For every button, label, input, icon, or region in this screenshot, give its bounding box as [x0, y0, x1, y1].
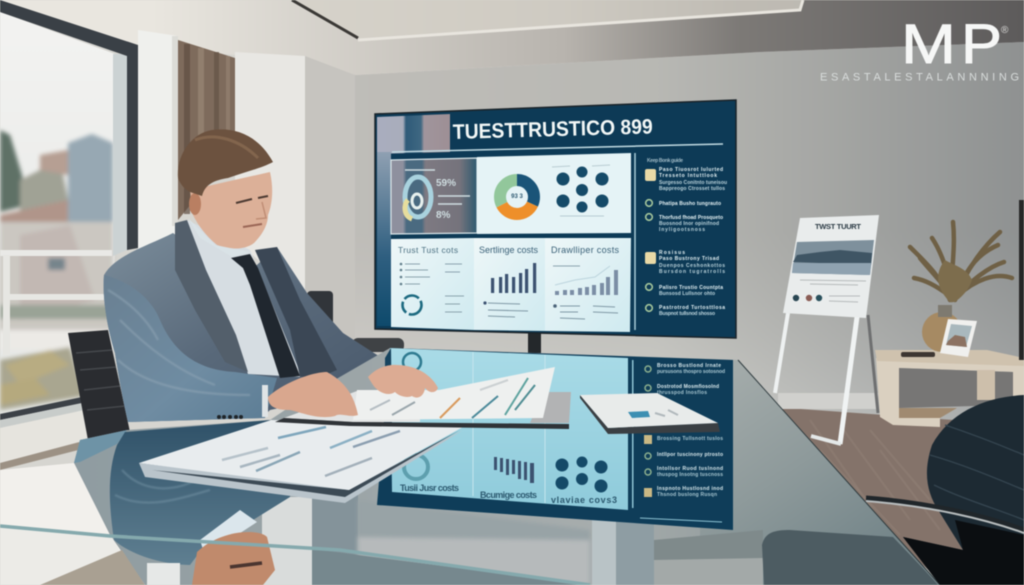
panel: key points list: Buspnot tullsnod shosso	[659, 311, 715, 317]
panel: key points list: Thorfusd fhoad Prosqueto	[659, 215, 723, 221]
reflected screen	[377, 348, 733, 530]
right black office chair	[866, 395, 1024, 585]
window with outdoor view	[0, 0, 138, 470]
reflected screen: Intllpor tuscinony ptrosto	[657, 452, 723, 458]
sleeve	[104, 275, 277, 422]
panel: key points list: Bappreogo Ctrosset tullos	[659, 186, 725, 192]
bright floor and window reflection	[0, 430, 145, 585]
poster title: TWST TUURT	[815, 222, 861, 231]
icon cluster	[556, 166, 608, 212]
panel: settling costs bar chart	[474, 238, 545, 331]
lapel	[175, 220, 248, 372]
reflected screen: vlaviae covs3	[551, 495, 617, 505]
panel: key points list: Rosisus	[659, 250, 685, 256]
logo: M	[901, 12, 956, 75]
reflected screen: Inspnoto Hustlosnd inod	[657, 486, 723, 492]
ceiling with soffit	[0, 0, 1024, 77]
panel: key points list: Surgesso Conitnto tuneisou	[659, 180, 727, 186]
panel: key points list: Duenpos Ceshonkottos	[659, 263, 725, 269]
curtain	[178, 40, 235, 220]
panel: drawing costs area bars: Drawlliper costs	[551, 245, 620, 255]
jacket buttons	[217, 415, 243, 419]
reflected screen: Bcumige costs	[480, 490, 537, 500]
table right edge line	[738, 360, 940, 585]
panel: key points list: Phatipa Busho tungrauto	[659, 201, 721, 207]
reflected screen: Brosso Bustlond Irnate	[657, 363, 721, 369]
reflected chair	[762, 530, 938, 585]
presentation easel poster	[775, 215, 879, 444]
glass table front edge	[0, 526, 590, 585]
shirt	[187, 220, 302, 377]
logo: P	[961, 12, 1002, 75]
reflected screen: Intollsor Ruod tuslnond	[657, 466, 723, 472]
rear chairs	[307, 291, 404, 352]
right side floor	[740, 393, 1024, 585]
left wall panels	[138, 30, 355, 340]
back wall	[355, 42, 1024, 420]
panel: donut and icon cluster	[477, 153, 631, 234]
glass surface at right	[733, 360, 940, 585]
near hand	[268, 372, 358, 417]
panel: key points list: Paso Bustrony Trisad	[659, 256, 719, 262]
plant in gold vase	[910, 222, 1012, 352]
poster photograph	[792, 240, 874, 275]
panel: key points list: Tresseto Intuttlook	[659, 173, 717, 179]
panel: percentage gauge	[391, 158, 477, 234]
small photo frame	[940, 319, 977, 357]
right document	[580, 393, 720, 434]
panel: key points list: Bunsosd Lullsnor ohto	[659, 291, 715, 297]
panel: key points list: Paso Tiuosrot Iulurted	[659, 167, 723, 173]
panel: percentage gauge: 59%	[436, 178, 456, 189]
reflection of man in table	[110, 420, 300, 585]
logo: ESASTALESTALANNNING	[820, 72, 1019, 84]
side table	[875, 350, 1024, 427]
reflected screen: thuspog Insotng tuscnoss	[657, 472, 723, 478]
panel: key points list	[645, 158, 727, 317]
tie	[231, 254, 300, 378]
left black office chair	[68, 330, 130, 440]
reflected screen: pursusons thospro sotosnod	[657, 369, 725, 375]
panel: settling costs bar chart: Sertlinge costs	[479, 245, 538, 255]
logo: ®	[1001, 25, 1009, 36]
panel: key points list: Buosnod Inor opinifnod	[659, 221, 719, 227]
panel: drawing costs area bars	[545, 238, 631, 332]
donut chart	[500, 180, 534, 214]
stand	[528, 333, 541, 353]
wall-mounted screen dashboard	[375, 100, 736, 353]
reflected screen: Brossing Tullsnott tuslos	[657, 436, 723, 442]
panel: key points list: Bursdon tugratrolls	[659, 269, 725, 275]
front paper stack	[139, 420, 463, 503]
right jacket shadow	[255, 247, 337, 377]
reflected wall and column	[262, 490, 654, 585]
bottom reflected band	[654, 542, 763, 585]
screen title: TUESTTRUSTICO 899	[452, 115, 653, 144]
far hand	[368, 365, 438, 398]
reflected screen: thrusspod Inosflos	[657, 390, 707, 396]
panel: key points list: Inyligootsnoss	[659, 227, 705, 233]
donut chart: 93 3	[511, 194, 523, 200]
glass table	[74, 348, 940, 585]
document under hands	[275, 367, 571, 429]
jacket	[104, 233, 388, 422]
reflected screen: Thsnod buslong Rusqn	[657, 492, 717, 498]
panel: key points list: Palisro Trustio Countpta	[659, 285, 723, 291]
panel: key points list: Pastrotrod Turtosttlosa	[659, 305, 725, 311]
panel: key points list: Keep Bonk guide	[647, 158, 683, 164]
panel: percentage gauge: 8%	[436, 210, 451, 221]
panel: trust costs	[391, 238, 474, 330]
reflected screen: Tusii Jusr costs	[400, 483, 459, 493]
man in grey suit	[104, 129, 388, 422]
reflected screen: Dostrotod Mosmfiosolnd	[657, 384, 719, 390]
logo	[820, 12, 1019, 84]
panel: trust costs: Trust Tust cots	[398, 245, 458, 255]
head	[178, 129, 273, 257]
cuff	[262, 385, 268, 417]
